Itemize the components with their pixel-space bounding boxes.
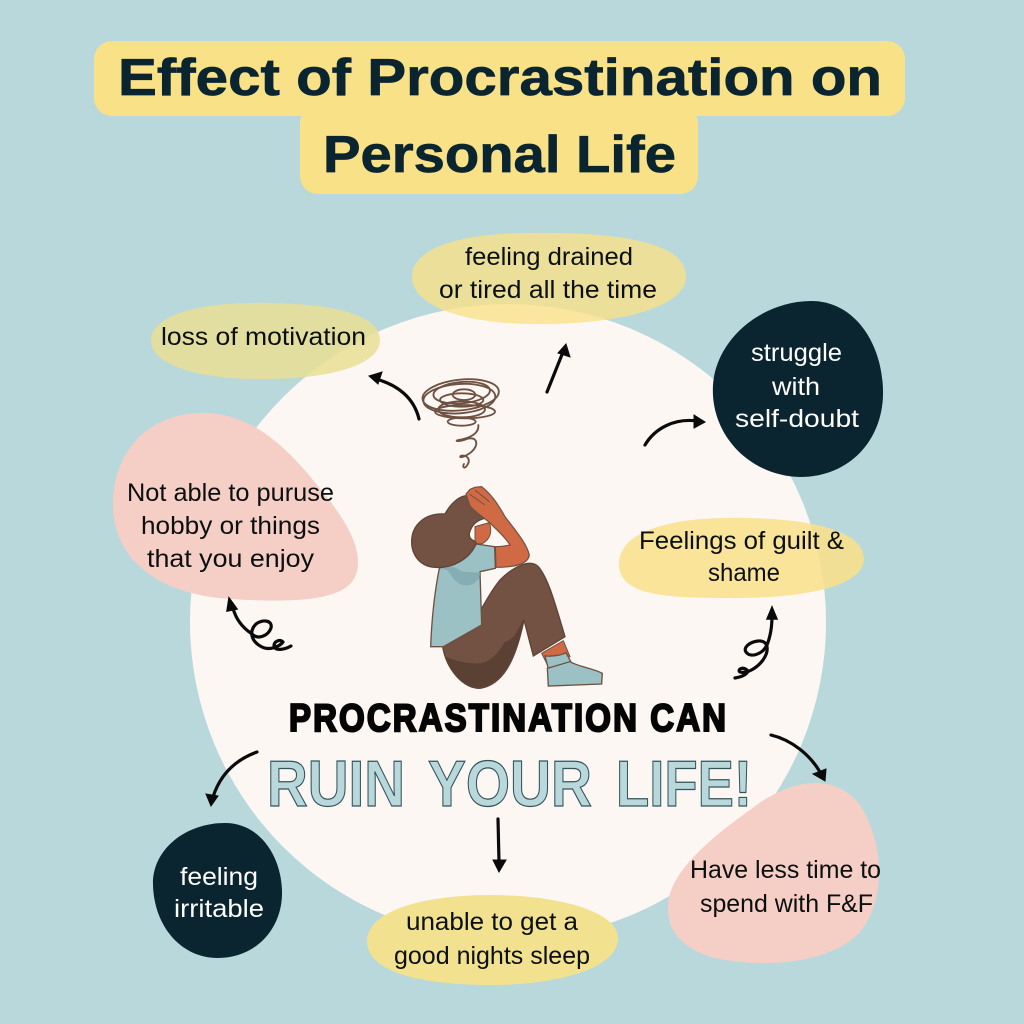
callout: guilt and shame xyxy=(619,518,864,598)
figure: face xyxy=(475,523,491,544)
callout: unable to sleep: good nights sleep xyxy=(394,942,590,970)
callout: not able to pursue hobby: that you enjoy xyxy=(147,545,315,573)
heading: procrastination can: PROCRASTINATION CAN xyxy=(289,695,726,740)
arrow: to less time xyxy=(771,735,826,781)
title xyxy=(94,41,905,194)
arrow: to feeling drained xyxy=(547,344,570,392)
central circle panel xyxy=(190,304,826,940)
callout: guilt and shame: shame xyxy=(708,559,780,587)
figure: fingers xyxy=(469,490,489,505)
callout: feeling irritable: irritable xyxy=(174,895,264,923)
callout: not able to pursue hobby xyxy=(113,413,358,601)
callout: less time with F&F: spend with F&F xyxy=(700,890,873,918)
figure: shoe xyxy=(547,662,602,686)
callout: not able to pursue hobby: Not able to puruse xyxy=(127,479,334,507)
callout: unable to sleep xyxy=(367,895,618,985)
arrow: curly to hobby blob xyxy=(227,598,291,649)
callout: not able to pursue hobby: hobby or things xyxy=(141,512,320,540)
heading: ruin your life: LIFE! xyxy=(616,747,752,820)
callout: less time with F&F xyxy=(668,783,881,963)
figure: hair xyxy=(412,496,485,567)
callout: feeling drained: feeling drained xyxy=(465,243,633,271)
callout: less time with F&F: Have less time to xyxy=(690,856,881,884)
figure: shirt xyxy=(431,544,495,647)
heading: ruin your life xyxy=(267,747,752,820)
callout: loss of motivation: loss of motivation xyxy=(161,323,366,351)
heading: ruin your life: YOUR xyxy=(428,747,592,820)
illustration: person with tangled thoughts xyxy=(412,376,602,688)
callout: struggle with self-doubt: with xyxy=(771,373,820,401)
callout: feeling irritable: feeling xyxy=(180,863,258,891)
arrow: to loss of motivation xyxy=(369,372,419,419)
arrow: curly to guilt blob xyxy=(735,607,777,678)
callout: struggle with self-doubt xyxy=(713,301,883,477)
callout: feeling drained xyxy=(412,233,686,324)
title: Personal Life xyxy=(323,126,676,184)
title: Effect of Procrastination on xyxy=(118,49,882,107)
callout: feeling irritable xyxy=(153,823,282,958)
figure: leg skin xyxy=(542,641,570,667)
icon: scribble xyxy=(421,376,500,467)
figure: trousers shade xyxy=(445,618,524,687)
figure: arm and hand xyxy=(466,487,529,567)
arrow: to self-doubt xyxy=(645,415,705,445)
callout: struggle with self-doubt: self-doubt xyxy=(735,405,859,433)
callout: loss of motivation xyxy=(151,303,380,379)
callout: guilt and shame: Feelings of guilt & xyxy=(639,527,844,555)
callout: unable to sleep: unable to get a xyxy=(406,908,578,936)
callout: feeling drained: or tired all the time xyxy=(439,276,657,304)
arrow: to feeling irritable xyxy=(206,752,257,806)
arrow: to sleep xyxy=(493,819,506,872)
heading: ruin your life: RUIN xyxy=(267,747,405,820)
figure: trousers xyxy=(443,563,565,688)
callout: struggle with self-doubt: struggle xyxy=(751,339,842,367)
figure: shirt shade xyxy=(440,567,480,585)
figure: sock xyxy=(545,653,572,669)
